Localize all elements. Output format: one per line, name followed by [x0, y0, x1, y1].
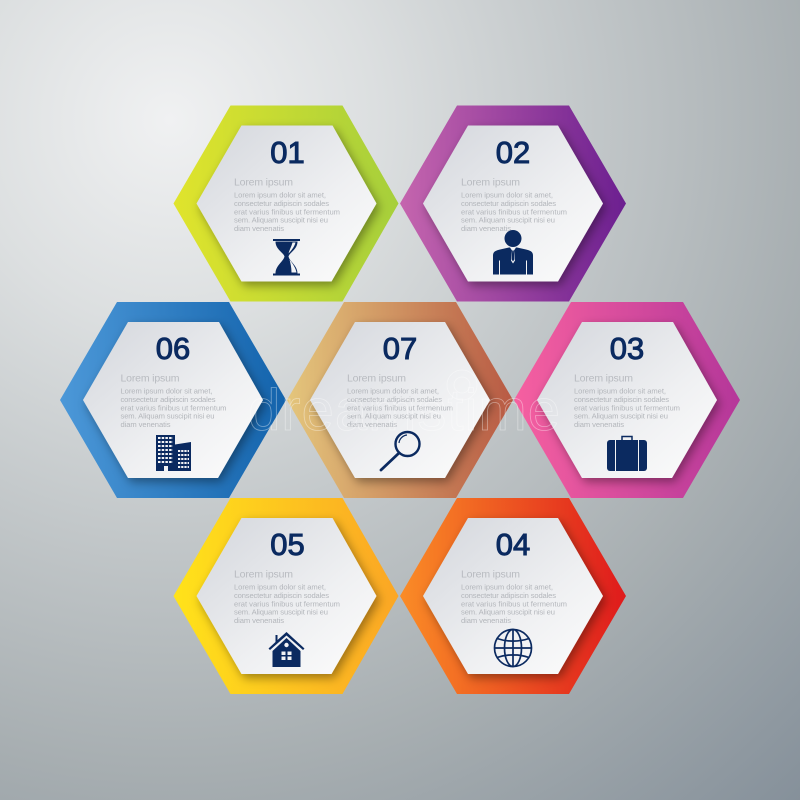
text block 03: sem. Aliquam suscipit nisi eu	[574, 412, 668, 421]
number 07: 07	[383, 331, 417, 366]
hexagon 07 card	[310, 322, 490, 478]
text block 01	[234, 190, 340, 233]
text block 07	[347, 386, 453, 429]
icon: office buildings	[156, 435, 191, 471]
text block 06: erat varius finibus ut fermentum	[120, 403, 226, 412]
icon: hourglass	[273, 239, 300, 276]
hexagon 03 card	[537, 322, 717, 478]
heading 06: Lorem ipsum	[120, 372, 180, 384]
text block 05	[234, 582, 340, 625]
hexagon 06 card	[83, 322, 263, 478]
text block 07: consectetur adipiscin sodales	[347, 395, 442, 404]
icon: globe	[494, 630, 532, 666]
text block 01: erat varius finibus ut fermentum	[234, 207, 340, 216]
panel: hexagon 05	[174, 498, 398, 694]
number 05: 05	[270, 527, 305, 562]
text block 03: consectetur adipiscin sodales	[574, 395, 669, 404]
text block 07: Lorem ipsum dolor sit amet,	[347, 386, 439, 396]
hexagon 02 card	[423, 126, 603, 282]
hexagon 02 ring	[400, 106, 626, 302]
text block 02: consectetur adipiscin sodales	[461, 199, 556, 208]
watermark: dreamstime	[248, 378, 560, 443]
panel: hexagon 06	[60, 302, 286, 498]
heading 02: Lorem ipsum	[461, 176, 520, 188]
text block 07: sem. Aliquam suscipit nisi eu	[347, 412, 441, 421]
text block 01: diam venenatis	[234, 224, 284, 233]
hexagon 05 card	[196, 518, 376, 674]
text block 06: Lorem ipsum dolor sit amet,	[120, 386, 212, 396]
icon: magnifying glass	[381, 432, 420, 470]
text block 01: sem. Aliquam suscipit nisi eu	[234, 216, 328, 225]
heading 01: Lorem ipsum	[234, 176, 293, 188]
text block 02: erat varius finibus ut fermentum	[461, 207, 567, 216]
number 03: 03	[610, 331, 644, 366]
icon: suitcase	[607, 436, 647, 471]
panel: hexagon 01	[174, 106, 398, 302]
text block 04: sem. Aliquam suscipit nisi eu	[461, 608, 555, 617]
panel: hexagon 07	[287, 302, 513, 498]
text block 05: erat varius finibus ut fermentum	[234, 599, 340, 608]
text block 01: consectetur adipiscin sodales	[234, 199, 329, 208]
hexagon 05 ring	[174, 498, 398, 694]
text block 07: diam venenatis	[347, 420, 397, 429]
number 01: 01	[270, 135, 305, 170]
heading 07: Lorem ipsum	[347, 372, 406, 384]
number 06: 06	[156, 331, 190, 366]
text block 03	[574, 386, 680, 429]
number 02: 02	[496, 135, 530, 170]
text block 01: Lorem ipsum dolor sit amet,	[234, 190, 326, 200]
text block 02: Lorem ipsum dolor sit amet,	[461, 190, 553, 200]
text block 06: sem. Aliquam suscipit nisi eu	[120, 412, 214, 421]
text block 07: erat varius finibus ut fermentum	[347, 403, 453, 412]
text block 05: Lorem ipsum dolor sit amet,	[234, 582, 326, 592]
text block 05: consectetur adipiscin sodales	[234, 591, 329, 600]
hexagon 01 ring	[174, 106, 398, 302]
text block 02: diam venenatis	[461, 224, 511, 233]
text block 02: sem. Aliquam suscipit nisi eu	[461, 216, 555, 225]
heading 04: Lorem ipsum	[461, 568, 520, 580]
panel: hexagon 04	[400, 498, 626, 694]
hexagon 06 ring	[60, 302, 286, 498]
hexagon 07 ring	[287, 302, 513, 498]
hexagon 04 card	[423, 518, 603, 674]
hexagon 03 ring	[514, 302, 740, 498]
text block 04: diam venenatis	[461, 616, 511, 625]
text block 03: Lorem ipsum dolor sit amet,	[574, 386, 666, 396]
text block 06: diam venenatis	[120, 420, 171, 429]
text block 04: Lorem ipsum dolor sit amet,	[461, 582, 553, 592]
text block 06: consectetur adipiscin sodales	[120, 395, 216, 404]
text block 06	[120, 386, 226, 429]
text block 03: diam venenatis	[574, 420, 624, 429]
text block 04: erat varius finibus ut fermentum	[461, 599, 567, 608]
text block 04: consectetur adipiscin sodales	[461, 591, 556, 600]
number 04: 04	[496, 527, 530, 562]
text block 05: sem. Aliquam suscipit nisi eu	[234, 608, 328, 617]
text block 05: diam venenatis	[234, 616, 284, 625]
hexagon 01 card	[196, 126, 376, 282]
hexagon 04 ring	[400, 498, 626, 694]
panel: hexagon 02	[400, 106, 626, 302]
heading 03: Lorem ipsum	[574, 372, 633, 384]
text block 04	[461, 582, 567, 625]
icon: house	[268, 632, 304, 667]
heading 05: Lorem ipsum	[234, 568, 293, 580]
panel: hexagon 03	[514, 302, 740, 498]
icon: businessman	[493, 230, 533, 274]
text block 03: erat varius finibus ut fermentum	[574, 403, 680, 412]
text block 02	[461, 190, 567, 233]
